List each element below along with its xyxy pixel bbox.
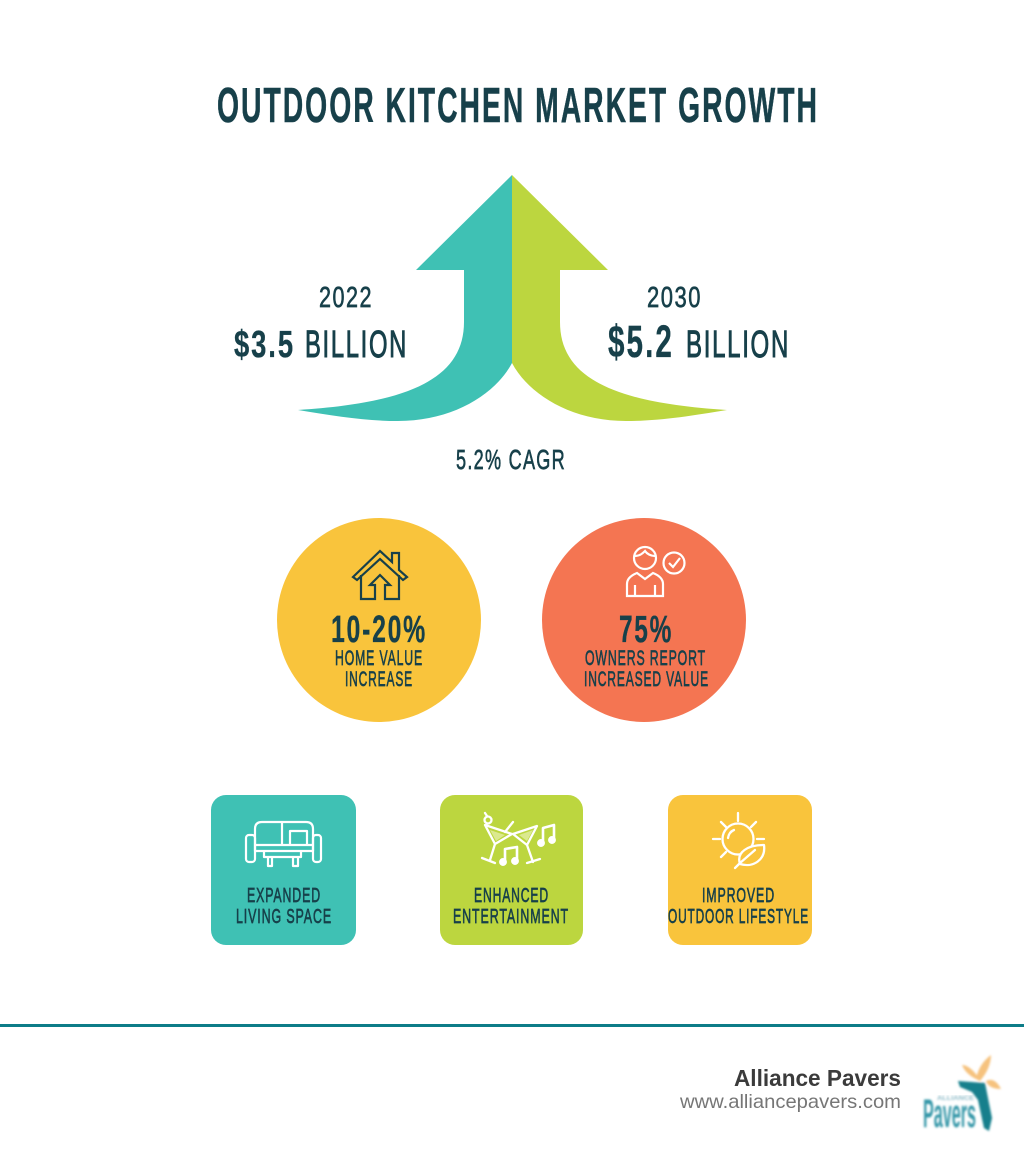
panel: owners stat: INCREASED VALUE <box>584 668 709 691</box>
panel: expanded living space <box>211 795 356 945</box>
logo: Alliance Pavers: ALLIANCE <box>937 1096 974 1102</box>
label: 2022 value: $3.5 <box>234 324 295 366</box>
label: 2022 value <box>234 282 408 366</box>
icon: house with up arrow <box>353 551 407 599</box>
logo: Alliance Pavers <box>923 1055 1001 1136</box>
panel: expanded living space: LIVING SPACE <box>236 905 332 928</box>
arrow left half: 2022 <box>298 175 512 421</box>
panel: home value stat: HOME VALUE <box>335 647 423 670</box>
icon: martini glasses and music notes <box>482 813 555 865</box>
label: 2030 value: BILLION <box>686 324 790 366</box>
footer: brand name: Alliance Pavers <box>734 1065 901 1091</box>
label: 2022 value: 2022 <box>319 282 373 314</box>
panel: home value stat: 10-20% <box>331 609 427 651</box>
panel: enhanced entertainment: ENTERTAINMENT <box>453 905 569 928</box>
label: 2022 value: BILLION <box>305 324 408 366</box>
footer: website: www.alliancepavers.com <box>679 1091 901 1113</box>
label: 2030 value <box>608 282 790 367</box>
panel: improved outdoor lifestyle <box>668 795 812 945</box>
icon: person with check mark <box>627 547 684 596</box>
label: CAGR: 5.2% CAGR <box>456 444 566 475</box>
label: 2030 value: 2030 <box>647 282 702 314</box>
panel: owners stat: 75% <box>619 609 673 651</box>
panel: owners stat: OWNERS REPORT <box>585 647 706 670</box>
label: 2030 value: $5.2 <box>608 316 674 367</box>
panel: enhanced entertainment <box>440 795 583 945</box>
icon: sofa <box>246 822 321 866</box>
panel: improved outdoor lifestyle: IMPROVED <box>702 884 775 907</box>
panel: owners stat <box>542 518 746 722</box>
arrow right half: 2030 <box>512 175 727 421</box>
icon: sun and leaf <box>713 813 764 868</box>
panel: home value stat <box>277 518 481 722</box>
chart: growth arrow <box>298 175 727 421</box>
panel: improved outdoor lifestyle: OUTDOOR LIFESTYLE <box>668 905 809 928</box>
panel: home value stat: INCREASE <box>345 668 413 691</box>
panel: expanded living space: EXPANDED <box>247 884 321 907</box>
panel: enhanced entertainment: ENHANCED <box>474 884 549 907</box>
